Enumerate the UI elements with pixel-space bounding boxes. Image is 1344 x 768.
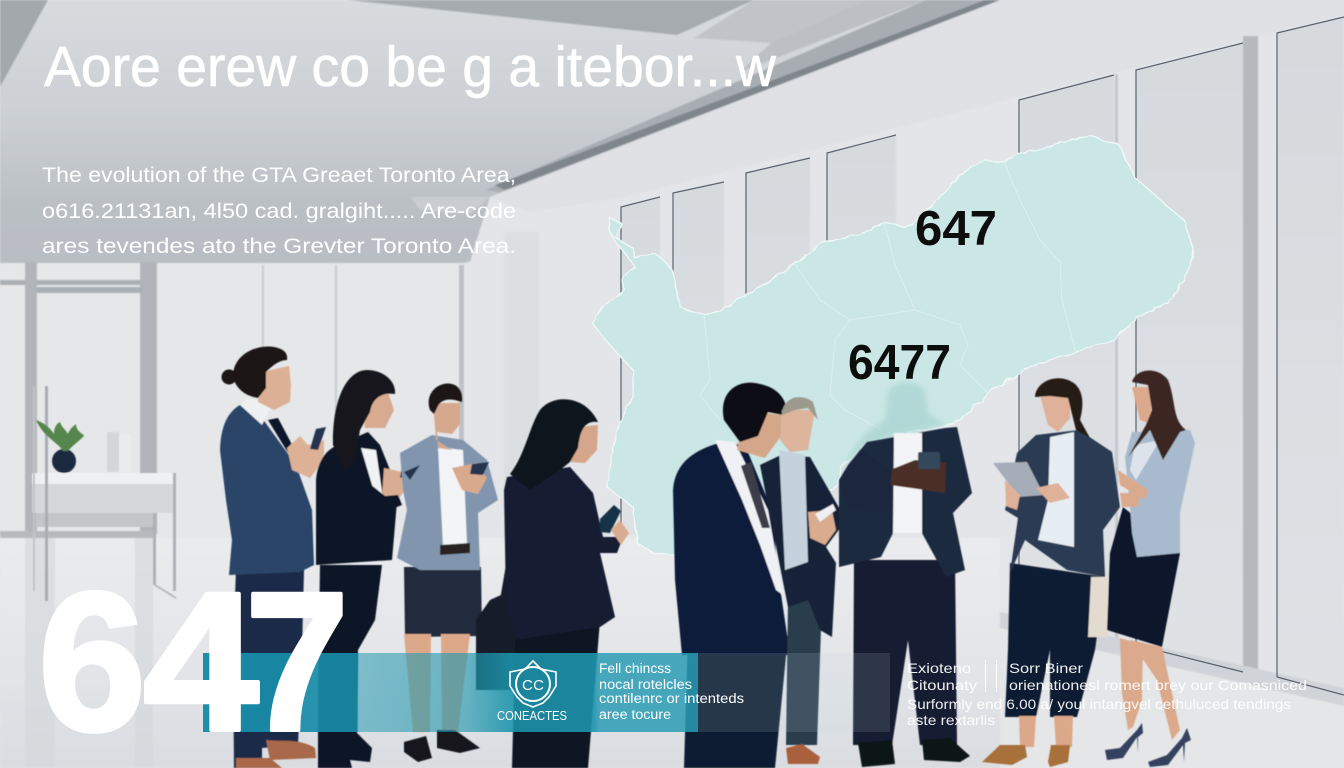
band description text: contilenrc or intenteds bbox=[599, 691, 744, 706]
faint overlay on legs right of band bbox=[698, 653, 890, 732]
large 647 figure bbox=[38, 551, 349, 768]
lower right text block: Surformly end 6.00 a/ youl intangvel cethuluced tendings bbox=[907, 696, 1291, 712]
intro text block: ares tevendes ato the Grevter Toronto Area. bbox=[42, 234, 516, 258]
band description text: aree tocure bbox=[599, 707, 671, 722]
lower right text block bbox=[907, 660, 1307, 728]
title: Aore erew co be g a itebor...w bbox=[44, 35, 777, 99]
lower right text block: Sorr Biner bbox=[1009, 660, 1083, 676]
intro text block: The evolution of the GTA Greaet Toronto Area, bbox=[42, 163, 516, 187]
map label: 6477: 6477 bbox=[848, 336, 951, 390]
intro text block: o616.21131an, 4l50 cad. gralgiht..... Are-code bbox=[42, 199, 516, 223]
person: man with bun and phone bbox=[220, 347, 326, 768]
person: man in navy suit bbox=[673, 383, 812, 768]
large 647 figure: 6 bbox=[38, 551, 146, 768]
band description text: nocal rotelcles bbox=[599, 677, 692, 692]
teal band with icon and text bbox=[203, 653, 744, 732]
background: far windows bbox=[621, 197, 660, 535]
large 647 figure: 7 bbox=[245, 551, 349, 768]
map label: 647: 647 bbox=[915, 202, 997, 256]
person: woman in light blazer bbox=[1088, 370, 1195, 767]
desk with plant and monitor bbox=[32, 386, 176, 601]
person: central man, phone in hands bbox=[839, 427, 972, 767]
lower right text block: Exioteno bbox=[907, 660, 971, 676]
icon: contacts badge bbox=[510, 661, 556, 707]
person: woman in black suit bbox=[316, 370, 420, 768]
person: woman with tablet bbox=[982, 378, 1120, 767]
background: ceiling bbox=[0, 0, 1000, 262]
large 647 figure: 4 bbox=[143, 551, 259, 768]
background: floor bbox=[0, 538, 1000, 768]
band description text: Fell chincss bbox=[599, 661, 671, 676]
icon: contacts badge: CC bbox=[522, 677, 544, 694]
lower right text block: aste rextarlis bbox=[907, 712, 995, 728]
person: woman in grey blazer bbox=[397, 384, 498, 762]
map of the Greater Toronto Area bbox=[592, 136, 1194, 555]
map: faint figure seen through the map bbox=[840, 382, 945, 490]
icon label: CONEACTES bbox=[497, 709, 567, 723]
intro text block bbox=[42, 163, 516, 258]
people group bbox=[220, 347, 1195, 768]
map: regional borders bbox=[700, 162, 1076, 430]
lower right text block: Citounaty bbox=[907, 677, 977, 693]
person: grey-haired man with phone bbox=[760, 397, 846, 764]
background: left wall and door bbox=[0, 262, 466, 538]
lower right text block: orienationesl romert brey our Comasniced bbox=[1009, 677, 1307, 693]
band description text bbox=[599, 661, 744, 722]
person: woman from behind with bag bbox=[476, 399, 629, 768]
